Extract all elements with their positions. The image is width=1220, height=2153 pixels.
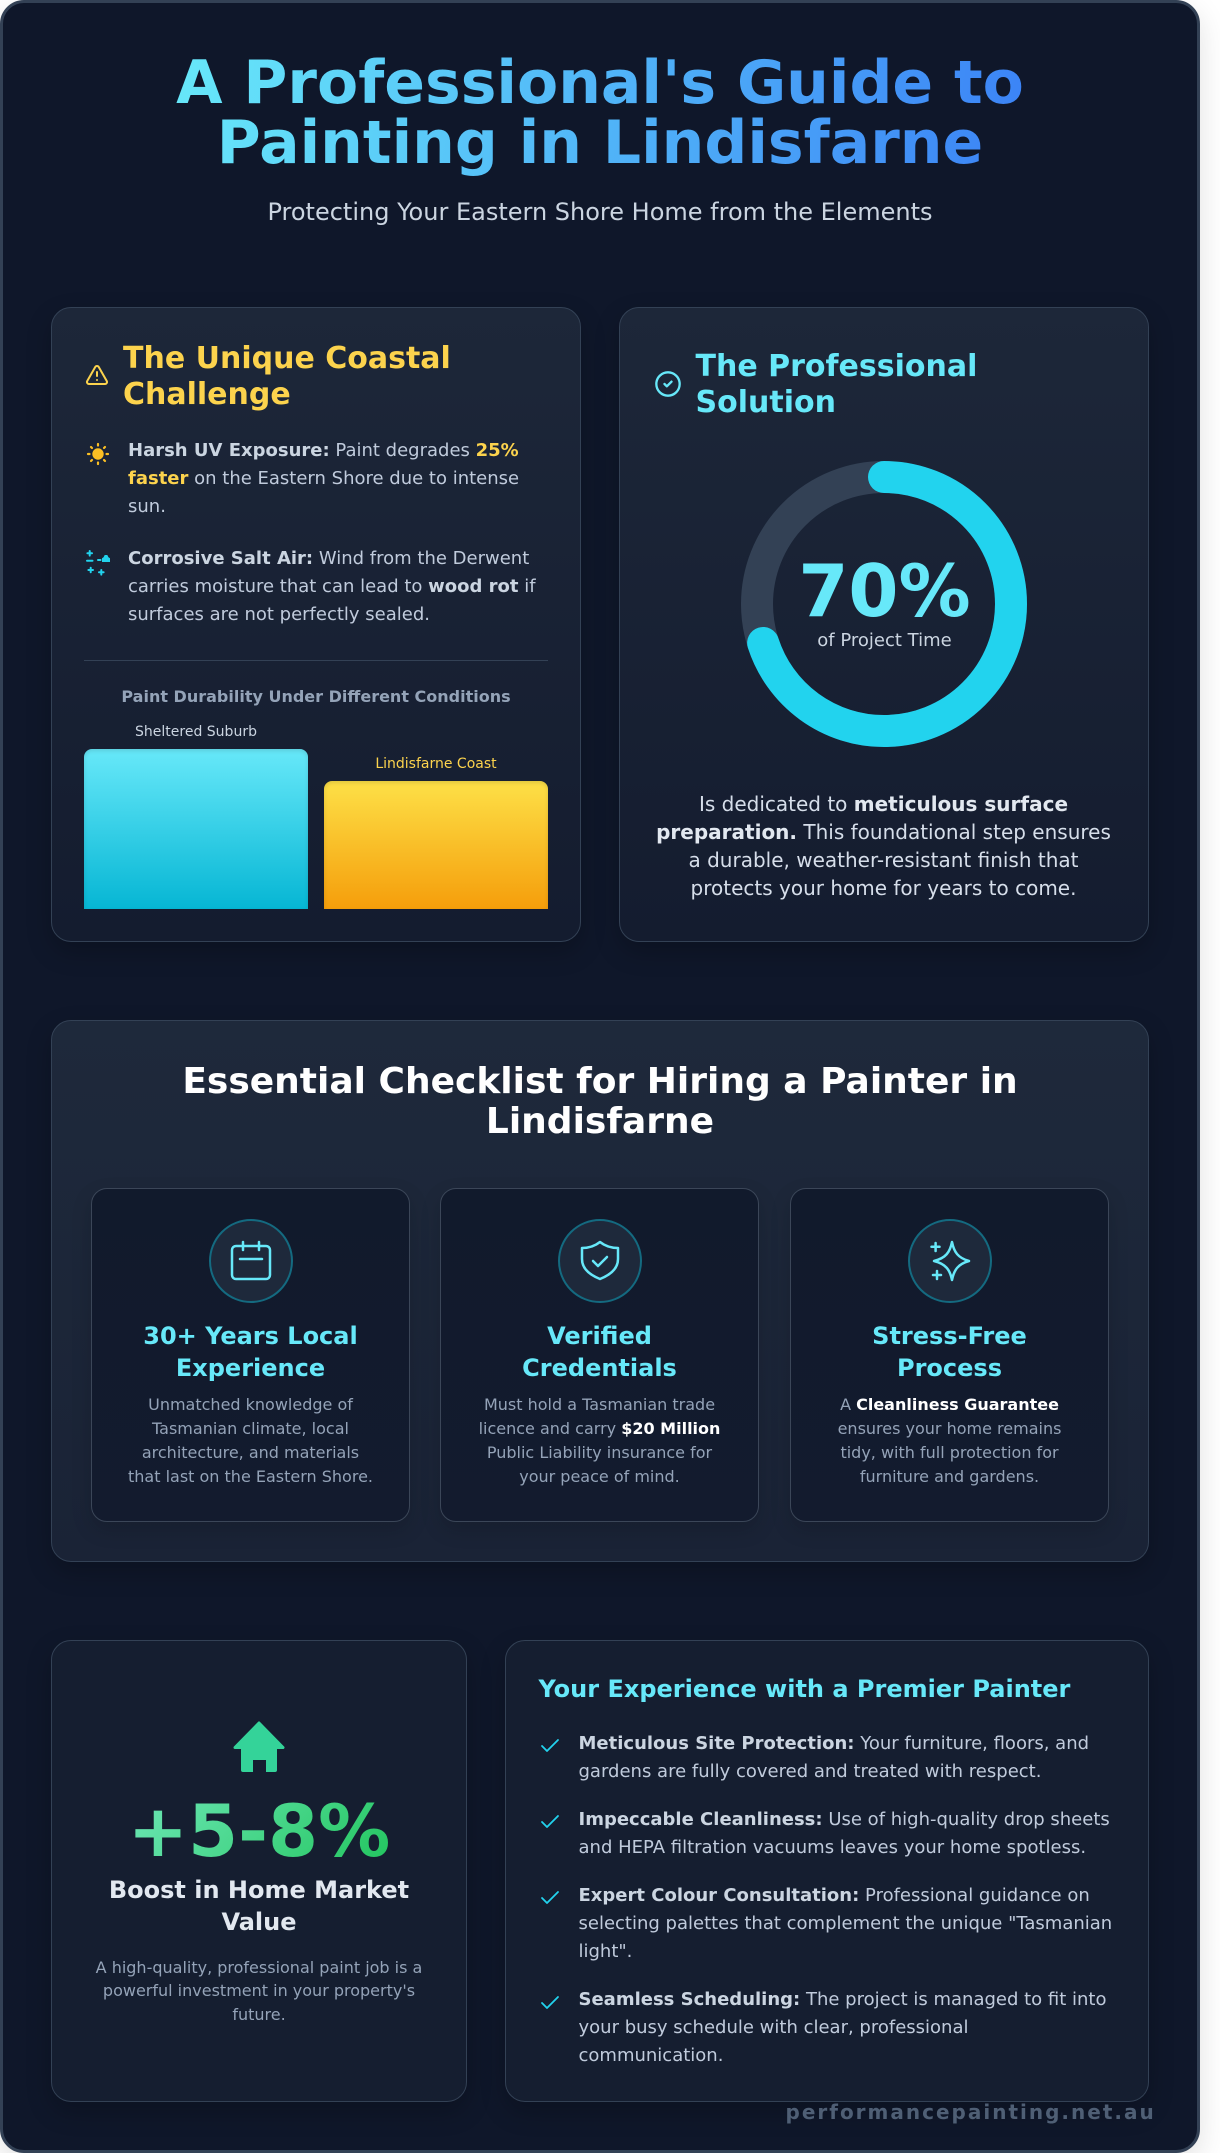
list item: cleanliness: Impeccable Cleanliness: Use of high-quality drop sheets (578, 1809, 1110, 1830)
stat text: A high-quality, professional paint job is a (96, 1958, 422, 1976)
text: corrosive salt air: Corrosive Salt Air: Wind from the Derwent (128, 548, 529, 569)
text: corrosive salt air: surfaces are not perfectly sealed. (128, 604, 430, 625)
text: surface preparation (656, 792, 1111, 900)
bar label: lindisfarne coast: Lindisfarne Coast (375, 756, 497, 772)
divider (84, 660, 548, 661)
heading: coastal challenge: The Unique Coastal (123, 340, 451, 376)
icon: house (234, 1721, 284, 1772)
heading: checklist (182, 1061, 1018, 1142)
title: Painting in Lindisfarne (217, 108, 983, 178)
stat text (96, 1958, 422, 2024)
panel: premier painter experience (505, 1640, 1149, 2102)
stat: +5-8%: +5-8% (128, 1789, 390, 1873)
heading: professional solution: The Professional (696, 348, 977, 384)
card text: licence and carry $20 Million (479, 1419, 720, 1438)
icon: check (541, 1891, 559, 1904)
card heading: 30+ Years Local (143, 1322, 358, 1350)
card text: furniture and gardens. (860, 1467, 1039, 1486)
text: corrosive salt air: carries moisture that can lead to wood rot if (128, 576, 536, 597)
bar: sheltered suburb (84, 749, 308, 909)
heading: professional solution: Solution (696, 384, 836, 420)
bar label: sheltered suburb: Sheltered Suburb (135, 724, 257, 740)
bar: lindisfarne coast (324, 781, 548, 909)
list item: colour consultation: selecting palettes that complement the unique "Tasmanian (578, 1913, 1112, 1934)
card text (838, 1395, 1061, 1486)
panel: essential checklist (51, 1020, 1149, 1562)
list item: cleanliness: and HEPA filtration vacuums leaves your home spotless. (578, 1837, 1086, 1858)
card text: Unmatched knowledge of (148, 1395, 353, 1414)
list item: scheduling: your busy schedule with clear, professional (578, 2017, 968, 2038)
footer url: performancepainting.net.au (786, 2100, 1156, 2124)
card text: ensures your home remains (838, 1419, 1061, 1438)
text: surface preparation: Is dedicated to meticulous surface (699, 792, 1068, 816)
heading: coastal challenge: Challenge (123, 376, 291, 412)
icon: sun (86, 442, 110, 466)
bar chart (84, 724, 548, 909)
card text: Public Liability insurance for (487, 1443, 712, 1462)
icon: check (541, 1996, 559, 2009)
card heading (522, 1322, 677, 1382)
list item: site protection: gardens are fully covered and treated with respect. (578, 1761, 1041, 1782)
text: surface preparation: preparation. This foundational step ensures (656, 820, 1111, 844)
icon: warning triangle (86, 365, 108, 385)
text: corrosive salt air (128, 548, 536, 625)
list item: scheduling: communication. (578, 2045, 723, 2066)
card: 30+ years local experience (91, 1188, 410, 1522)
card text: architecture, and materials (142, 1443, 359, 1462)
icon: check circle (655, 371, 681, 397)
card text: tidy, with full protection for (840, 1443, 1059, 1462)
icon: shield (558, 1219, 642, 1303)
heading: coastal challenge (123, 340, 451, 412)
text: harsh UV exposure: faster on the Eastern Shore due to intense (128, 468, 519, 489)
stat caption: of Project Time (817, 630, 952, 651)
list item: scheduling (541, 1989, 1107, 2066)
heading: checklist: Lindisfarne (486, 1101, 714, 1142)
heading: checklist: Essential Checklist for Hiring a Painter in (182, 1061, 1018, 1102)
icon: sparkles (908, 1219, 992, 1303)
heading: professional solution (696, 348, 977, 420)
card text (128, 1395, 373, 1486)
list item: cleanliness (541, 1809, 1110, 1858)
stat heading: Value (221, 1908, 297, 1936)
list item: colour consultation: Expert Colour Consultation: Professional guidance on (578, 1885, 1090, 1906)
stat text: future. (232, 2005, 286, 2024)
text: harsh UV exposure: Harsh UV Exposure: Paint degrades 25% (128, 440, 519, 460)
list item: scheduling: Seamless Scheduling: The project is managed to fit into (578, 1989, 1107, 2010)
card text: your peace of mind. (519, 1467, 680, 1486)
panel: market value (51, 1640, 467, 2102)
card heading: Process (897, 1354, 1002, 1382)
panel: coastal challenge (51, 307, 581, 942)
icon: calendar (209, 1219, 293, 1303)
card: stress-free process (790, 1188, 1108, 1522)
card heading (143, 1322, 358, 1382)
stat: 70%: 70% (798, 549, 971, 633)
card heading: Stress-Free (872, 1322, 1027, 1350)
card text: A Cleanliness Guarantee (840, 1395, 1059, 1414)
donut chart (741, 461, 1027, 747)
text: surface preparation: protects your home for years to come. (691, 876, 1076, 900)
card text: Must hold a Tasmanian trade (484, 1395, 715, 1414)
list item: site protection (541, 1733, 1089, 1782)
subtitle: Protecting Your Eastern Shore Home from the Elements (267, 198, 933, 226)
list item: site protection: Meticulous Site Protection: Your furniture, floors, and (578, 1733, 1089, 1754)
icon: check (541, 1739, 559, 1752)
card text: Tasmanian climate, local (152, 1419, 349, 1438)
card heading: Credentials (522, 1354, 677, 1382)
chart title: Paint Durability Under Different Conditions (121, 686, 511, 706)
text: surface preparation: a durable, weather-resistant finish that (688, 848, 1078, 872)
card heading: Experience (176, 1354, 325, 1382)
icon: check (541, 1815, 559, 1828)
list item: colour consultation (541, 1885, 1112, 1962)
heading: experience: Your Experience with a Premier Painter (538, 1675, 1070, 1703)
card text (479, 1395, 720, 1486)
card heading: Verified (547, 1322, 652, 1350)
stat heading: Boost in Home Market (109, 1876, 409, 1904)
text: harsh UV exposure (128, 440, 519, 517)
text: harsh UV exposure: sun. (128, 496, 166, 517)
stat text: powerful investment in your property's (103, 1981, 415, 2000)
card: verified credentials (440, 1188, 758, 1522)
icon: salt air (86, 550, 110, 576)
card text: that last on the Eastern Shore. (128, 1467, 373, 1486)
stat heading (109, 1876, 409, 1936)
panel: professional solution (619, 307, 1149, 942)
list item: colour consultation: light". (578, 1941, 632, 1962)
card heading (872, 1322, 1027, 1382)
title (176, 48, 1024, 178)
title: A Professional's Guide to (176, 48, 1024, 118)
